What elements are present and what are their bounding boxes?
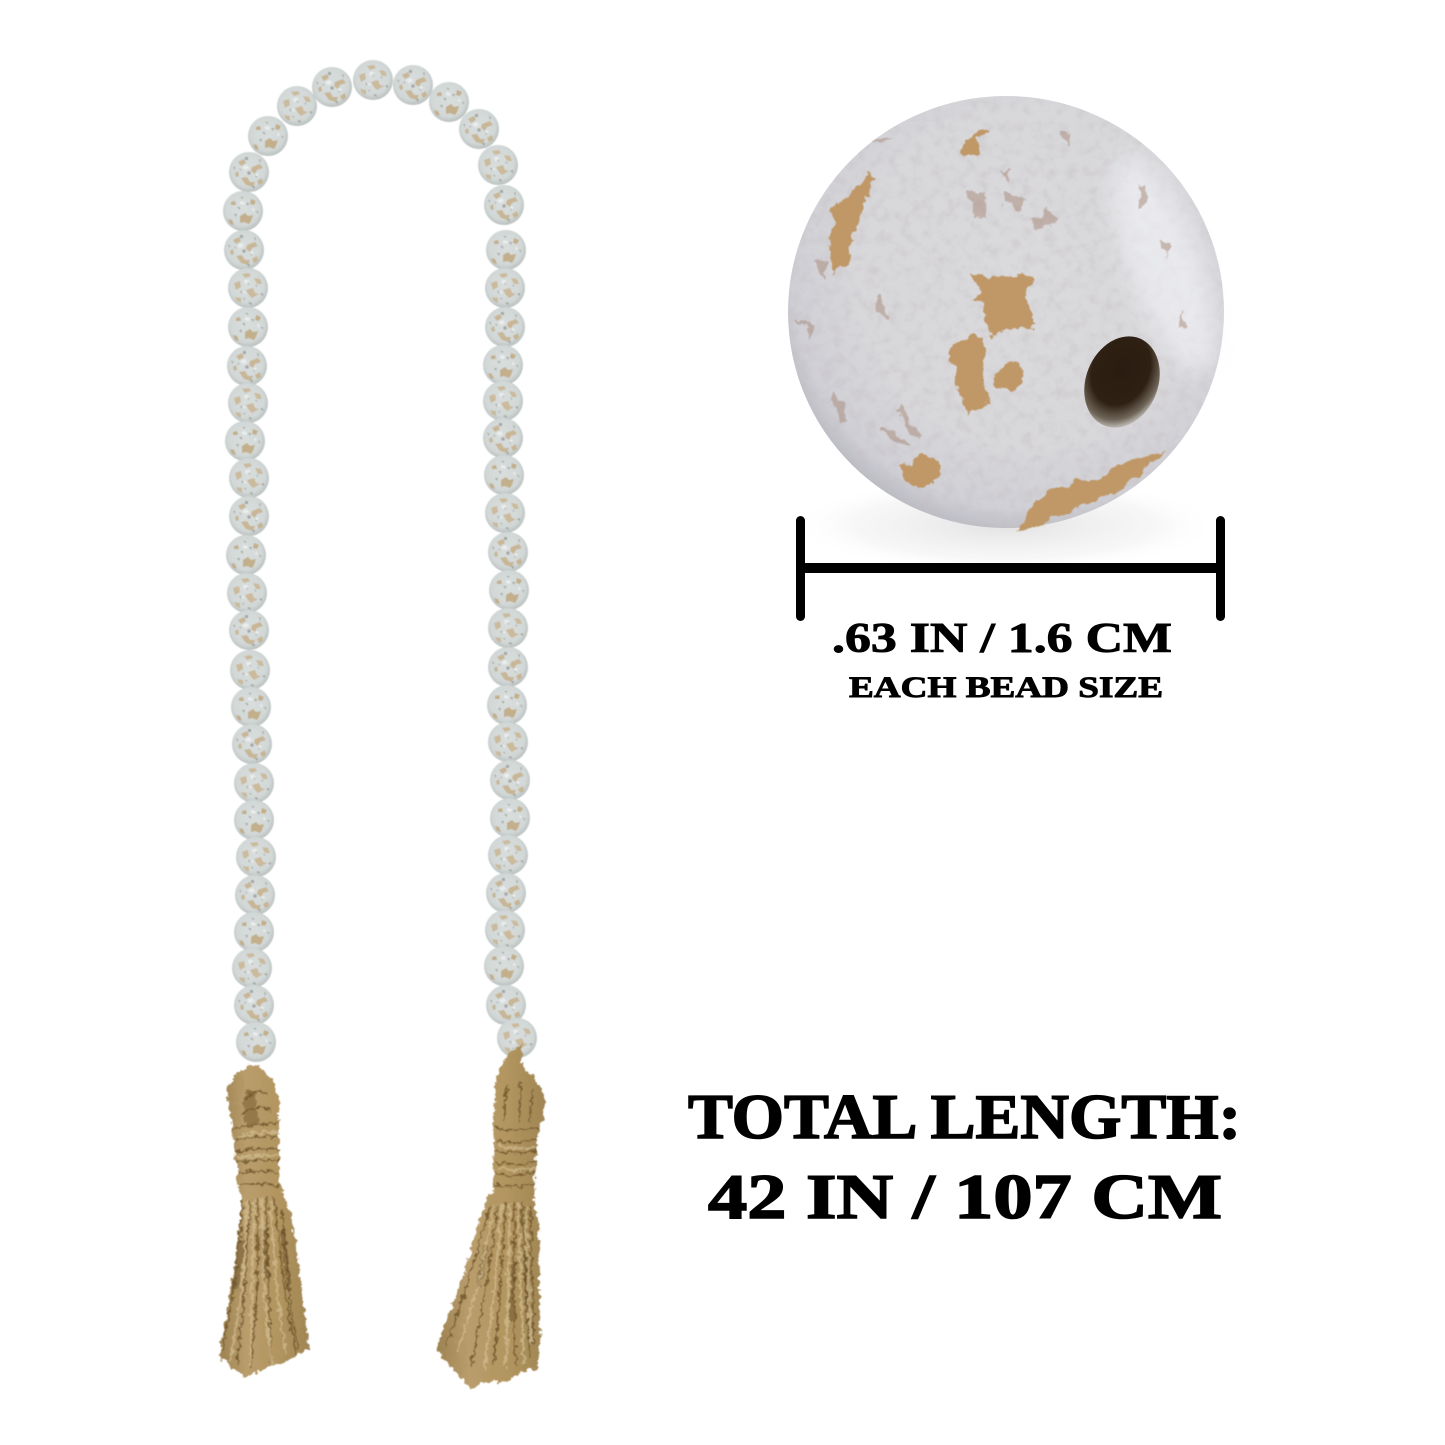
dimension bar: bead width: [796, 516, 1225, 621]
bead size caption: EACH BEAD SIZE: [849, 671, 1163, 704]
right jute tassel: [436, 1045, 545, 1389]
total length heading: TOTAL LENGTH:: [688, 1081, 1241, 1152]
bead size measurement: .63 IN / 1.6 CM: [832, 616, 1172, 662]
large bead photo: [788, 96, 1238, 573]
total length value: 42 IN / 107 CM: [708, 1161, 1222, 1232]
bead strand: [223, 60, 537, 1062]
left jute tassel: [219, 1064, 309, 1378]
